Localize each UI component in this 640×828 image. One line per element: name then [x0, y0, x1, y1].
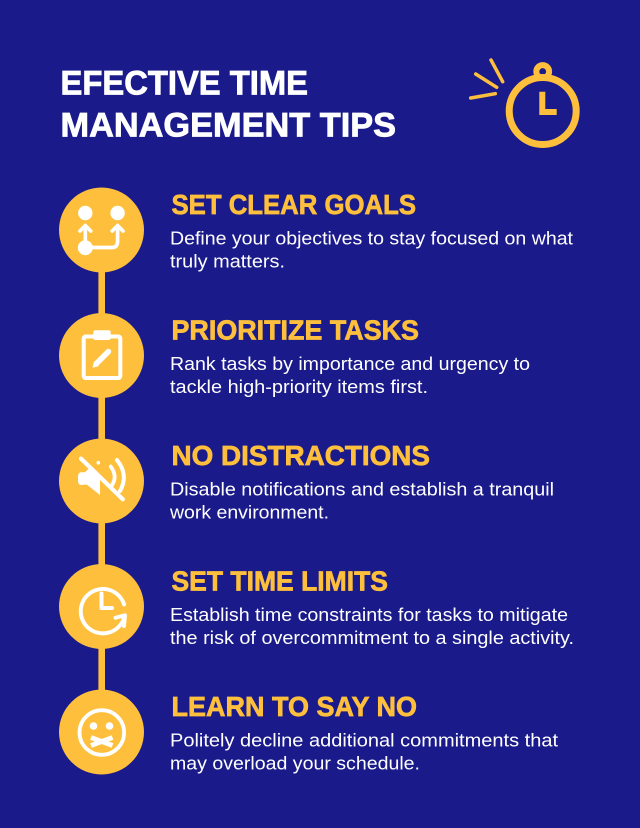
text: prioritize tasks description: Rank tasks by importance and urgency to [170, 353, 530, 374]
panel: no distractions [59, 438, 554, 524]
text: set time limits description: the risk of overcommitment to a single activity. [170, 627, 574, 648]
title [60, 64, 396, 144]
text: set clear goals description [170, 228, 573, 272]
text: no distractions description: work environment. [169, 502, 329, 522]
text: set time limits description [170, 604, 574, 648]
text: set clear goals description: truly matters. [170, 250, 285, 272]
text: no distractions description: Disable notifications and establish a tranquil [170, 478, 554, 500]
icon: stopwatch [471, 60, 576, 144]
icon: muted speaker [59, 438, 144, 524]
icon: goal paths [59, 188, 144, 272]
panel: learn to say no [59, 690, 558, 774]
heading: no distractions: NO DISTRACTIONS [172, 440, 430, 471]
icon: silenced face [59, 690, 144, 774]
icon: clipboard with pencil [59, 313, 144, 398]
panel: set clear goals [59, 188, 573, 272]
title: EFECTIVE TIME [60, 64, 308, 102]
text: learn to say no description: may overload your schedule. [170, 752, 420, 774]
text: learn to say no description: Politely decline additional commitments that [170, 730, 558, 750]
text: prioritize tasks description: tackle high-priority items first. [170, 376, 428, 397]
heading: learn to say no: LEARN TO SAY NO [172, 691, 417, 722]
text: set time limits description: Establish time constraints for tasks to mitigate [170, 604, 568, 625]
heading: prioritize tasks: PRIORITIZE TASKS [172, 314, 419, 346]
heading: set clear goals: SET CLEAR GOALS [172, 189, 416, 220]
text: learn to say no description [170, 730, 558, 774]
text: prioritize tasks description [170, 353, 530, 397]
text: no distractions description [169, 478, 554, 522]
icon: clock with arrow [59, 564, 144, 649]
timeline connector [98, 230, 105, 732]
text: set clear goals description: Define your objectives to stay focused on what [170, 228, 573, 248]
title: MANAGEMENT TIPS [60, 106, 396, 144]
heading: set time limits: SET TIME LIMITS [172, 566, 388, 596]
panel: prioritize tasks [59, 313, 530, 398]
panel: set time limits [59, 564, 574, 649]
